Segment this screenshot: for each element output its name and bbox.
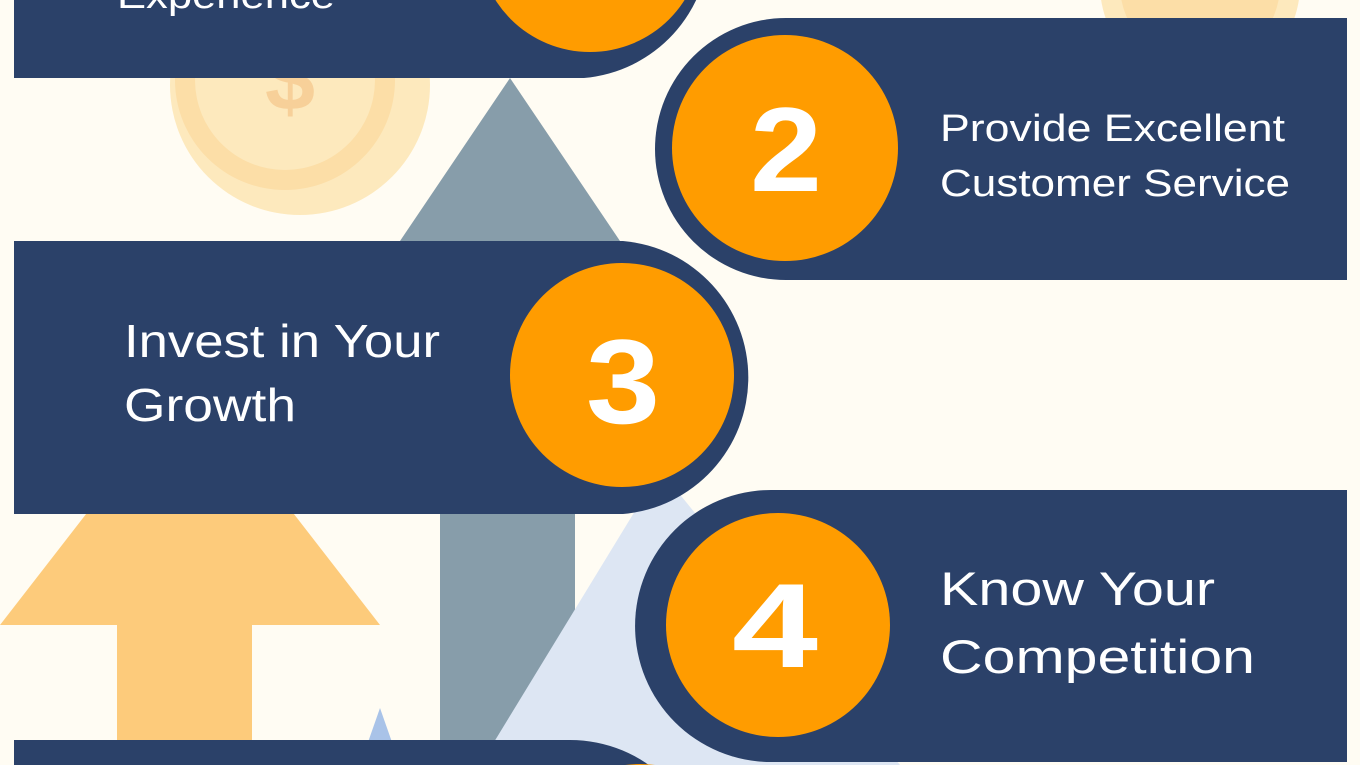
step 4 [635,490,1347,762]
step 3 [14,241,748,514]
step 2: Provide Excellent [940,108,1286,150]
icon: coin left [170,0,430,215]
step 3: 3 [586,315,660,449]
step 2: Customer Service [940,163,1290,205]
icon: coin top right [1100,0,1300,85]
arrow: light orange [0,380,380,765]
arrow: light blue [480,470,900,765]
arrow: small blue [360,708,400,765]
arrow: steel [400,78,620,765]
step 3: Growth [124,379,296,431]
step 1 [14,0,709,78]
step 5 [14,740,752,765]
step 4: Competition [940,630,1255,683]
icon: coin left: $ [265,30,315,130]
step 2 [655,18,1347,280]
step 2: 2 [750,83,822,217]
step 3: Invest in Your [124,315,440,367]
step 4: 4 [732,559,818,693]
step 4: Know Your [940,562,1215,615]
